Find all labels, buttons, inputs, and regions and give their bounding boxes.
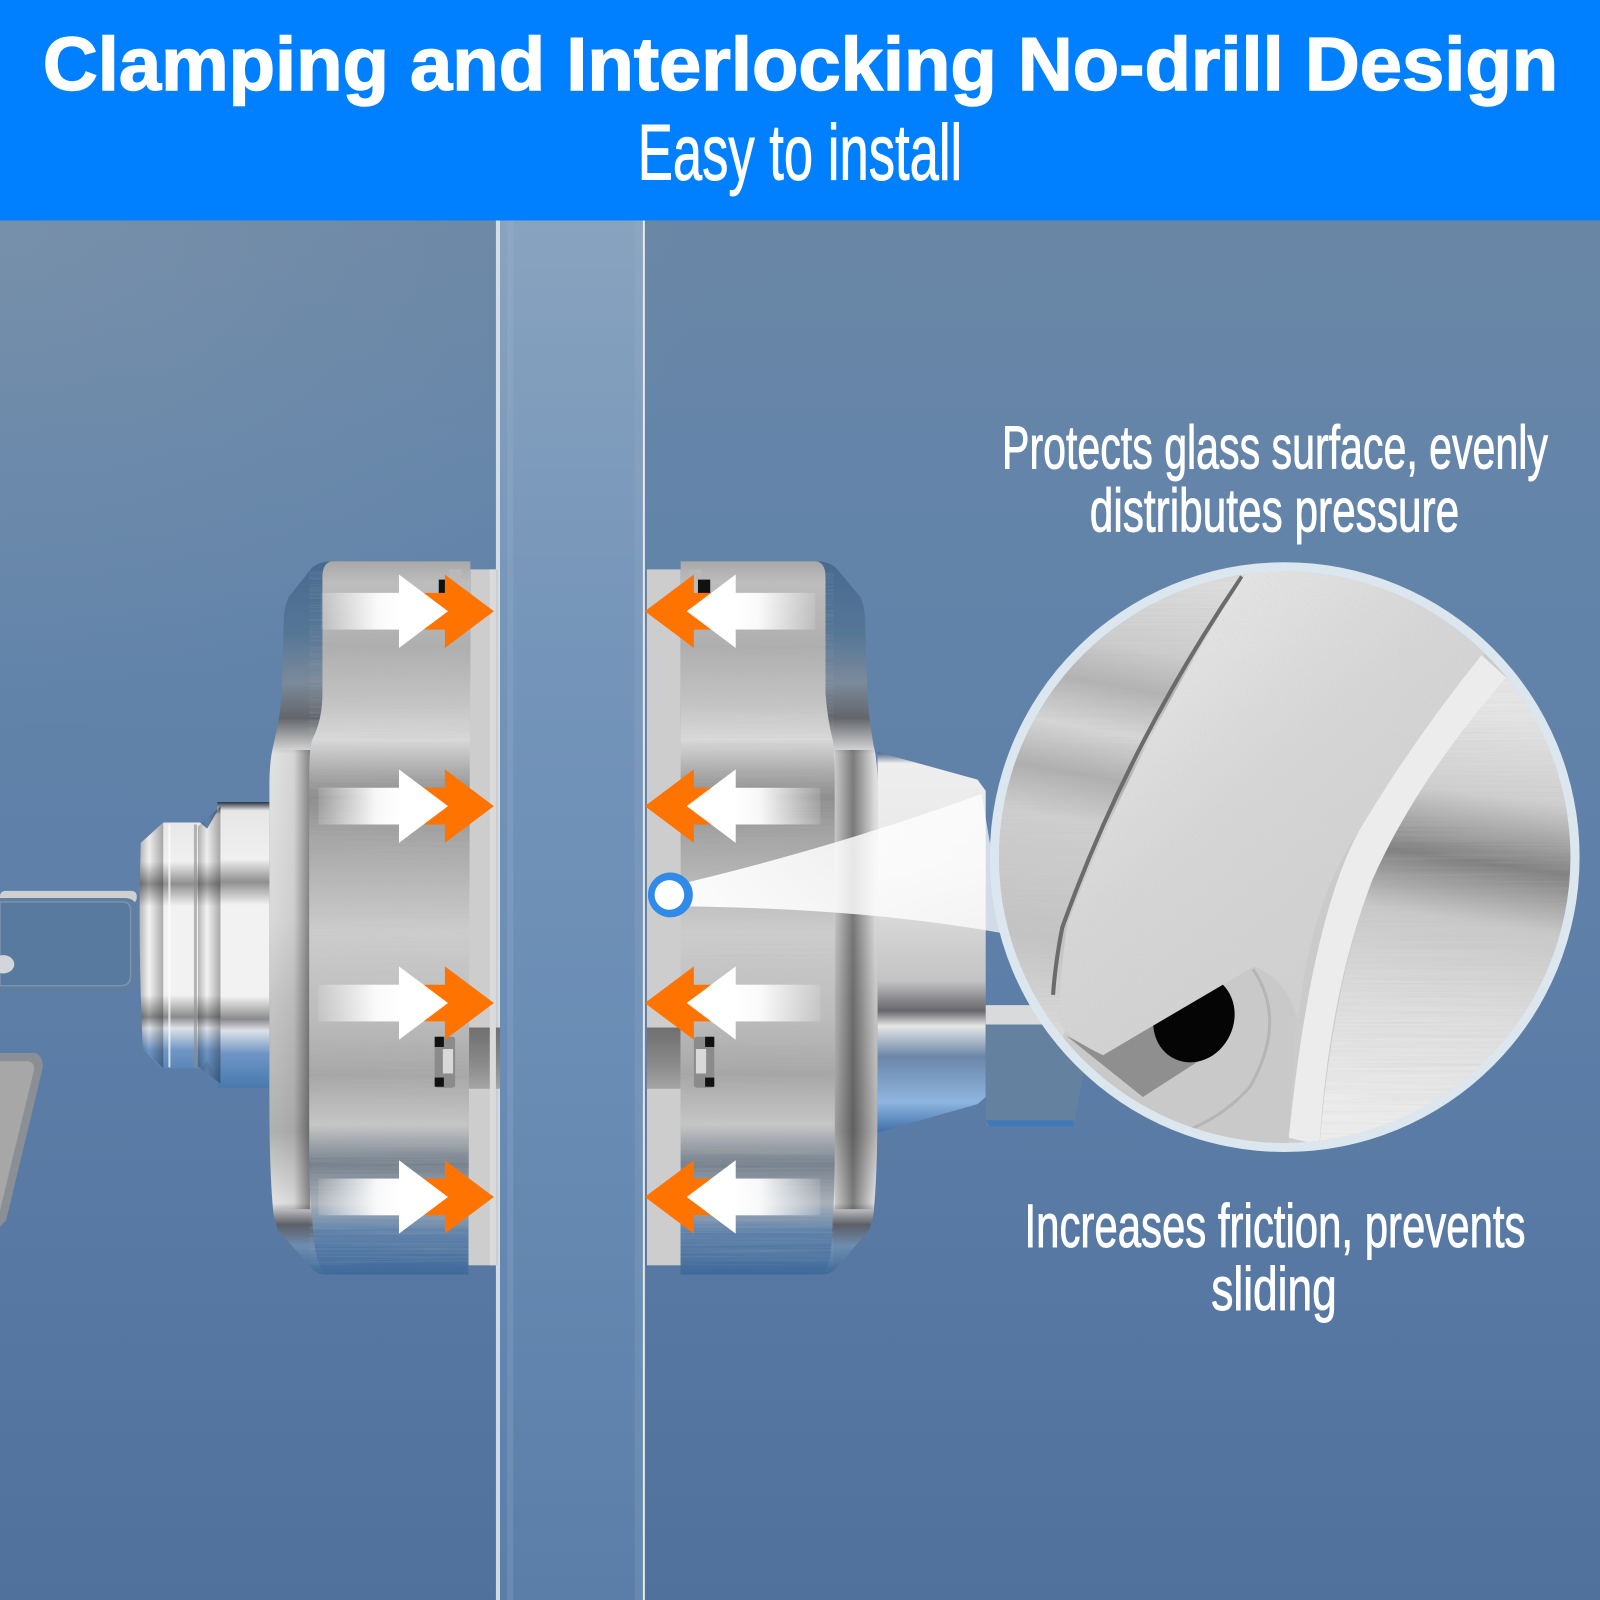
callout text: protects glass surface [1002, 413, 1548, 545]
detail: recess base [990, 561, 1582, 1173]
subtitle: Easy to install [638, 109, 962, 197]
callout text: increases friction: sliding [1211, 1255, 1337, 1323]
arrow row 3 left [318, 966, 494, 1040]
detail: dark hole [1153, 984, 1235, 1062]
arrow row 4 left [318, 1160, 494, 1234]
detail: brushed metal left [999, 574, 1244, 1036]
detail: recess around hole [1066, 1041, 1288, 1143]
header banner [0, 0, 1600, 220]
right knob [878, 752, 1086, 1133]
arrow row 3 right [645, 966, 820, 1040]
title: Clamping and Interlocking No-drill Design [43, 23, 1558, 107]
right lock body [681, 561, 878, 1274]
arrow row 1 right [645, 574, 815, 648]
right gasket [647, 569, 683, 1265]
key [0, 891, 137, 993]
callout beam [673, 794, 1005, 934]
arrow row 2 left [318, 769, 494, 843]
key handle [0, 1053, 43, 1227]
detail: metal wedge under pad [1066, 1026, 1198, 1097]
callout text: increases friction [1024, 1192, 1526, 1323]
magnifier detail circle [990, 551, 1592, 1173]
arrow row 2 right [645, 769, 820, 843]
pressure arrows: left side [318, 574, 494, 1234]
arrow row 1 left [321, 574, 494, 648]
detail: brushed metal right [1320, 677, 1570, 1140]
callout marker dot [648, 872, 693, 917]
detail: recess shading arc [1192, 968, 1272, 1128]
left lock body [269, 561, 470, 1274]
pressure arrows: right side [645, 574, 820, 1234]
left gasket [464, 569, 500, 1265]
detail: white strip [1289, 655, 1506, 1145]
arrow row 4 right [645, 1160, 820, 1234]
detail: dark seam line [1053, 577, 1242, 995]
detail: gasket pad [1059, 551, 1485, 1055]
left lock: cylinder [140, 802, 269, 1088]
